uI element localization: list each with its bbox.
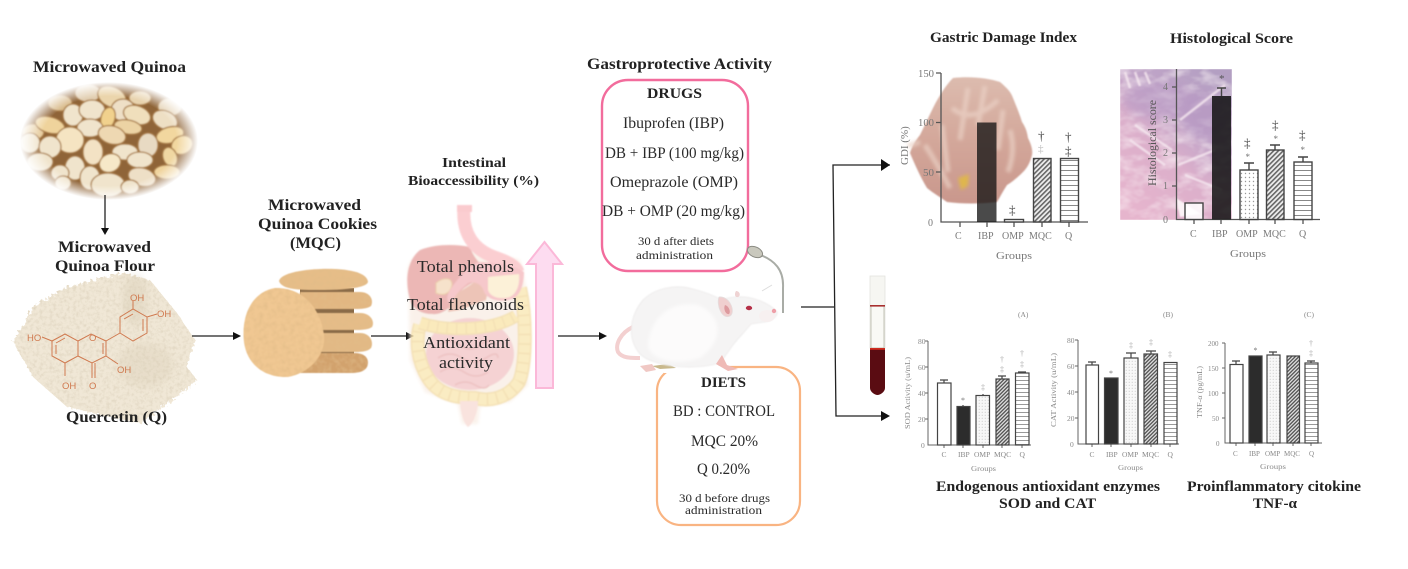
heading: Intestinal Bioaccessibility (%): Bioaccessibility (%)	[408, 173, 539, 188]
bars	[977, 122, 1078, 222]
photo: quinoa seeds	[17, 79, 201, 203]
note: timing after diets: 30 d after diets	[638, 236, 715, 248]
significance marks: *	[1219, 73, 1224, 85]
diagram: quercetin molecule	[27, 293, 171, 392]
axis labels: 60	[1067, 362, 1075, 371]
significance marks: *	[1274, 134, 1278, 144]
bars	[1230, 352, 1318, 443]
axis labels	[1049, 310, 1174, 472]
axis labels: 20	[1067, 414, 1075, 423]
text: bioaccessibility compounds: Antioxidant	[423, 333, 510, 352]
axis labels: MQC	[1142, 450, 1159, 459]
axis labels: Q	[1168, 450, 1174, 459]
axis labels: 2	[1163, 148, 1168, 159]
axis labels: 80	[918, 337, 926, 346]
axis labels: 150	[1208, 365, 1219, 373]
axis labels: (B)	[1163, 310, 1174, 319]
arrow: bracket from rat to outcomes	[801, 159, 890, 421]
heading: DRUGS: DRUGS	[647, 86, 702, 102]
significance marks: ‡	[1020, 360, 1024, 369]
heading: Microwaved Quinoa Cookies (MQC): Microwaved	[268, 197, 361, 214]
axis labels: Groups	[1230, 248, 1266, 260]
significance marks: ‡	[1149, 338, 1153, 347]
y axis	[1172, 69, 1320, 224]
chart: histological score	[1120, 69, 1320, 260]
axis labels: Q	[1309, 450, 1314, 458]
heading: Microwaved Quinoa Flour	[55, 239, 155, 275]
axis labels: 20	[918, 415, 926, 424]
arrow: quinoa to flour	[101, 195, 109, 235]
heading: Microwaved Quinoa Cookies (MQC): (MQC)	[290, 235, 341, 252]
photo: blood sample tube	[870, 276, 885, 395]
axis labels: 100	[1208, 390, 1219, 398]
heading: DIETS: DIETS	[701, 375, 746, 391]
axis labels: OMP	[1265, 450, 1280, 458]
axis labels: 50	[923, 168, 934, 179]
heading: Histological Score: Histological Score	[1170, 31, 1294, 47]
panel: diets	[657, 367, 800, 525]
axis labels: OMP	[1122, 450, 1138, 459]
axis labels: 0	[921, 441, 925, 450]
significance marks: ‡	[1299, 127, 1306, 142]
photo: cookie stack	[244, 269, 373, 377]
axis labels	[903, 310, 1029, 473]
text: bioaccessibility compounds: Total phenols	[417, 257, 514, 276]
significance marks	[1109, 338, 1172, 378]
axis labels: 3	[1163, 115, 1168, 126]
diagram: quercetin molecule: HO	[27, 333, 41, 344]
axis labels: 1	[1163, 181, 1168, 192]
bars	[938, 372, 1029, 445]
heading: Intestinal Bioaccessibility (%)	[408, 155, 539, 188]
axis labels: 0	[1216, 440, 1220, 448]
significance marks: ‡	[1000, 365, 1004, 374]
chart: CAT activity	[1049, 310, 1179, 472]
significance marks	[1254, 339, 1313, 358]
significance marks: †	[1020, 349, 1024, 358]
heading: Proinflammatory citokine TNF-alpha: Proinflammatory citokine	[1187, 479, 1362, 495]
significance marks: †	[1000, 355, 1004, 364]
heading: Proinflammatory citokine TNF-alpha: TNF-α	[1253, 496, 1297, 512]
list: diet groups	[673, 403, 775, 478]
list: drug groups: DB + OMP (20 mg/kg)	[602, 203, 745, 220]
significance marks: †	[1065, 129, 1072, 144]
axis labels: MQC	[994, 450, 1011, 459]
axis labels	[899, 69, 1073, 262]
axis labels: IBP	[958, 450, 970, 459]
bars	[1185, 88, 1312, 220]
significance marks: ‡	[1129, 341, 1133, 350]
chart: gastric damage index	[899, 69, 1088, 262]
axis labels	[1195, 310, 1314, 471]
axis labels: IBP	[1212, 229, 1228, 240]
heading: Endogenous antioxidant enzymes SOD and CAT: Endogenous antioxidant enzymes	[936, 479, 1160, 495]
axis labels: OMP	[1236, 229, 1258, 240]
arrow: pink upward increase	[527, 242, 562, 388]
axis labels: IBP	[1106, 450, 1118, 459]
axis labels: Q	[1020, 450, 1026, 459]
significance marks	[961, 349, 1024, 405]
list: drug groups: Ibuprofen (IBP)	[623, 115, 724, 132]
axis labels: 0	[1163, 215, 1168, 226]
significance marks: *	[1300, 145, 1306, 155]
axis labels: C	[942, 450, 947, 459]
axis labels: MQC	[1263, 229, 1286, 240]
axis labels: Histological score	[1147, 100, 1159, 186]
diagram: quercetin molecule: O	[89, 381, 96, 392]
axis labels: 60	[918, 363, 926, 372]
note: timing after diets	[636, 236, 715, 262]
axis labels: GDI (%)	[899, 126, 911, 165]
heading: Gastroprotective Activity: Gastroprotective Activity	[587, 56, 772, 73]
arrow: cookies to intestine	[371, 332, 414, 340]
axis labels: IBP	[1249, 450, 1260, 458]
axis labels: TNF-α (pg/mL)	[1195, 365, 1204, 418]
text: bioaccessibility compounds	[407, 257, 524, 372]
axis labels: (A)	[1018, 310, 1029, 319]
heading: Endogenous antioxidant enzymes SOD and CAT	[936, 479, 1160, 512]
axis labels: C	[1190, 229, 1197, 240]
significance marks: ‡	[1244, 135, 1251, 150]
axis labels: Groups	[1260, 462, 1286, 471]
chart: SOD activity	[903, 310, 1031, 473]
heading: Microwaved Quinoa Cookies (MQC): Quinoa Cookies	[258, 216, 377, 233]
diagram: quercetin molecule: OH	[62, 381, 76, 392]
axis labels: Q	[1065, 231, 1073, 242]
photo: stomach tissue	[908, 77, 1032, 204]
diagram: quercetin molecule: OH	[117, 365, 131, 376]
heading: Gastric Damage Index: Gastric Damage Index	[930, 30, 1078, 46]
note: timing before drugs: 30 d before drugs	[679, 493, 771, 505]
significance marks: *	[1109, 369, 1113, 378]
diagram: quercetin molecule: O	[89, 333, 96, 344]
note: timing before drugs: administration	[685, 505, 762, 517]
axis labels: IBP	[978, 231, 994, 242]
note: timing after diets: administration	[636, 250, 713, 262]
bars	[1086, 351, 1177, 444]
axis labels: Groups	[971, 464, 996, 473]
significance marks	[1219, 73, 1306, 162]
list: diet groups: BD : CONTROL	[673, 403, 775, 420]
axis labels: 4	[1163, 82, 1168, 93]
axis labels: 0	[928, 218, 933, 229]
significance marks: *	[1254, 346, 1258, 355]
heading: Proinflammatory citokine TNF-alpha	[1187, 479, 1362, 512]
heading: Intestinal Bioaccessibility (%): Intestinal	[442, 155, 506, 170]
axis labels: 150	[918, 69, 934, 80]
axis labels: Q	[1299, 229, 1307, 240]
y axis	[936, 73, 1088, 227]
axis labels: OMP	[1002, 231, 1024, 242]
photo: stomach histology	[1120, 69, 1232, 220]
chart: TNF-alpha	[1195, 310, 1322, 471]
significance marks: *	[961, 396, 965, 405]
label: Quercetin (Q): Quercetin (Q)	[66, 409, 167, 426]
arrow: intestine to rat	[558, 332, 607, 340]
significance marks: ‡	[981, 383, 985, 392]
axis labels: (C)	[1304, 310, 1314, 319]
heading: Microwaved Quinoa Flour: Microwaved	[58, 239, 151, 256]
axis labels: OMP	[974, 450, 990, 459]
axis labels: C	[1090, 450, 1095, 459]
axis labels: Groups	[996, 250, 1032, 262]
axis labels: 80	[1067, 336, 1075, 345]
arrow: flour to cookies	[192, 332, 241, 340]
photo: quinoa flour pile	[13, 273, 197, 423]
significance marks: †	[1038, 128, 1045, 143]
heading: Microwaved Quinoa Flour: Quinoa Flour	[55, 258, 155, 275]
axis labels: 40	[918, 389, 926, 398]
axis labels: C	[1233, 450, 1238, 458]
illustration: digestive tract	[407, 205, 529, 427]
text: bioaccessibility compounds: activity	[439, 353, 494, 372]
axis labels: 200	[1208, 340, 1219, 348]
axis labels: 50	[1212, 415, 1220, 423]
text: bioaccessibility compounds: Total flavonoids	[407, 295, 524, 314]
diagram: quercetin molecule: OH	[157, 309, 171, 320]
significance marks: ‡	[1065, 143, 1072, 158]
significance marks: ‡	[1038, 143, 1044, 155]
panel: drugs	[602, 80, 748, 271]
axis labels: MQC	[1284, 450, 1300, 458]
illustration: white rat with gavage tube	[617, 244, 783, 373]
axis labels: 100	[918, 118, 934, 129]
significance marks: ‡	[1272, 117, 1279, 132]
axis labels: C	[955, 231, 962, 242]
list: diet groups: Q 0.20%	[697, 461, 750, 478]
axis labels: 40	[1067, 388, 1075, 397]
axis labels	[1147, 82, 1307, 260]
diagram: quercetin molecule: OH	[130, 293, 144, 304]
list: diet groups: MQC 20%	[691, 433, 758, 450]
significance marks: ‡	[1009, 202, 1016, 217]
axis labels: Groups	[1118, 463, 1143, 472]
significance marks: †	[1309, 339, 1313, 348]
significance marks: *	[1246, 152, 1250, 162]
heading: Endogenous antioxidant enzymes SOD and CAT: SOD and CAT	[999, 496, 1096, 512]
list: drug groups: Omeprazole (OMP)	[610, 174, 738, 191]
list: drug groups	[602, 115, 745, 220]
axis labels: SOD Activity (u/mL)	[903, 356, 912, 429]
significance marks	[1009, 128, 1072, 217]
heading: Microwaved Quinoa Cookies (MQC)	[258, 197, 377, 252]
significance marks: ‡	[1168, 350, 1172, 359]
axis labels: MQC	[1029, 231, 1052, 242]
axis labels: CAT Activity (u/mL)	[1049, 352, 1058, 427]
list: drug groups: DB + IBP (100 mg/kg)	[605, 145, 744, 162]
note: timing before drugs	[679, 493, 771, 517]
axis labels: 0	[1070, 440, 1074, 449]
significance marks: ‡	[1309, 349, 1313, 358]
heading: Microwaved Quinoa: Microwaved Quinoa	[33, 59, 186, 76]
